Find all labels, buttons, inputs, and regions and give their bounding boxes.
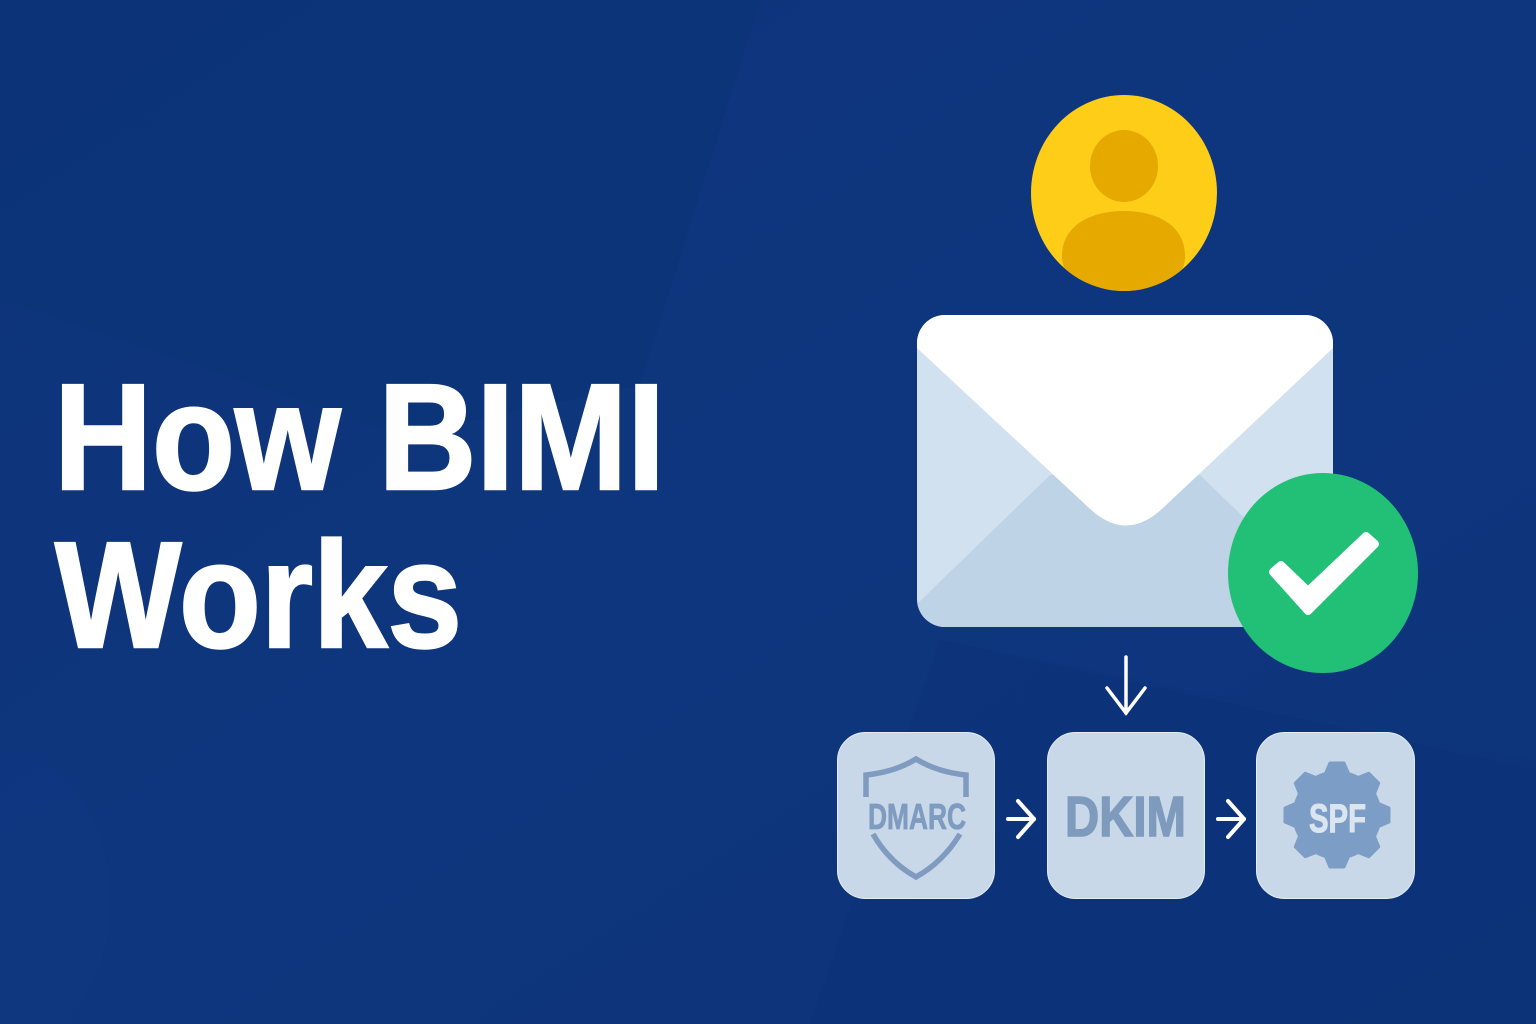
icon: yellow user avatar bbox=[1031, 95, 1217, 295]
arrow: down to DKIM bbox=[1107, 657, 1145, 713]
label: DKIM: DKIM bbox=[1065, 785, 1186, 849]
icon: shield outline bbox=[866, 759, 966, 877]
label: DMARC: DMARC bbox=[868, 796, 966, 837]
title: Works bbox=[55, 510, 462, 679]
icon: green check badge bbox=[1228, 473, 1418, 673]
title bbox=[54, 352, 665, 679]
card: DMARC bbox=[838, 732, 994, 898]
arrow: DKIM to SPF bbox=[1218, 801, 1244, 837]
card: DKIM bbox=[1048, 732, 1204, 898]
icon: envelope bbox=[917, 315, 1333, 627]
infographic canvas bbox=[54, 95, 1418, 899]
title: How BIMI bbox=[54, 352, 665, 521]
icon: gear bbox=[1285, 763, 1389, 867]
label: SPF: SPF bbox=[1309, 797, 1366, 841]
arrow: DMARC to DKIM bbox=[1008, 801, 1034, 837]
card: SPF bbox=[1256, 732, 1414, 898]
